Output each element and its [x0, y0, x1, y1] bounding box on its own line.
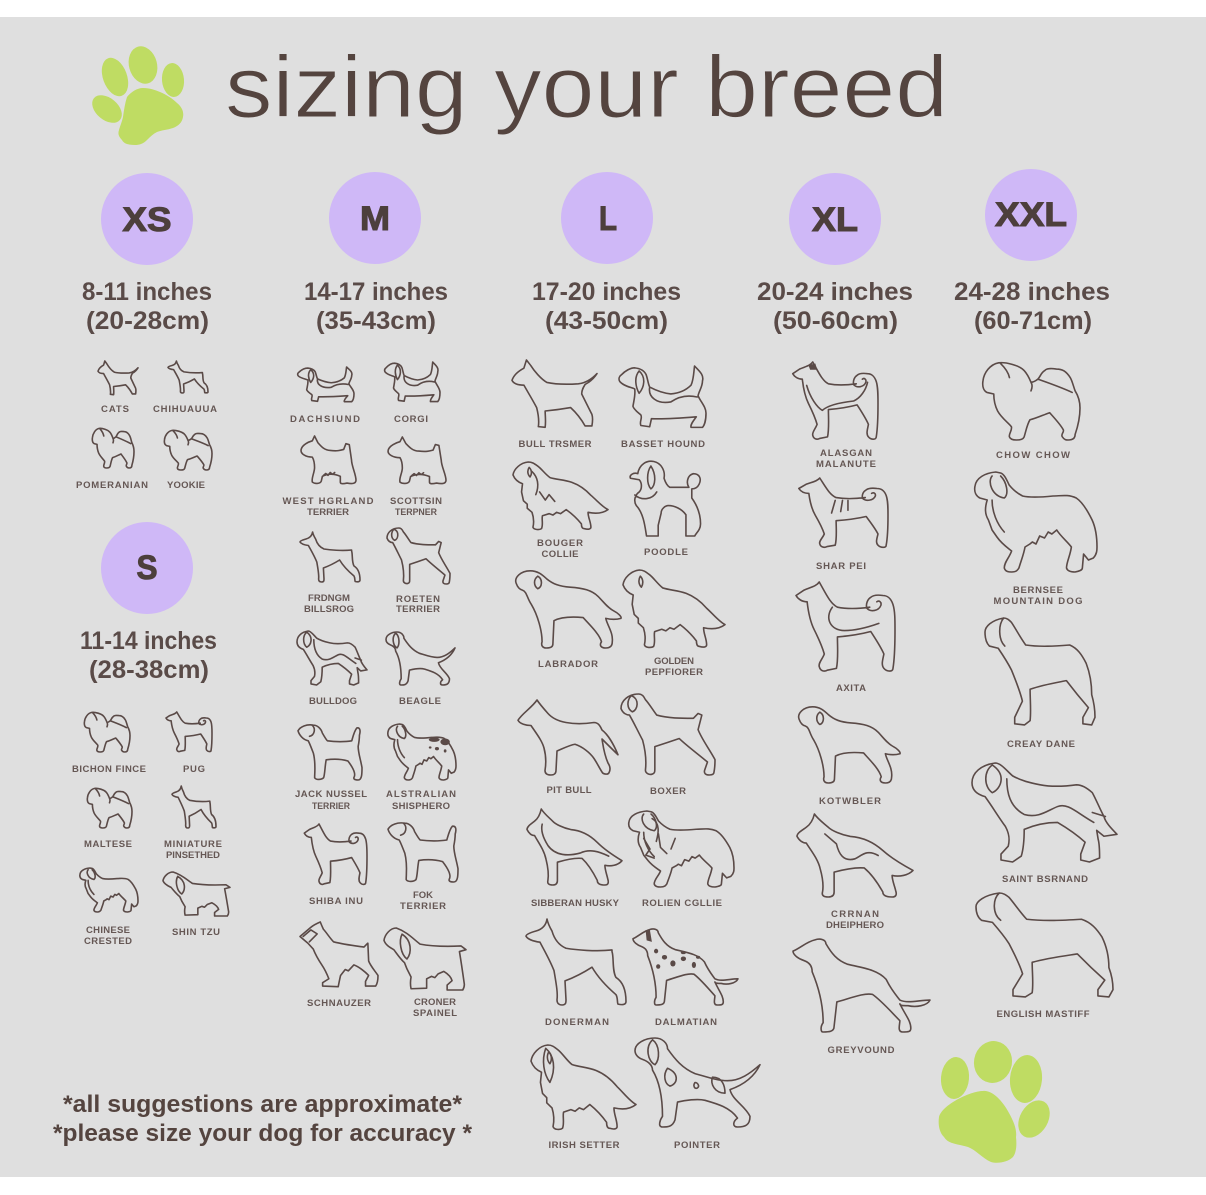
dog: scottish terrier: TERPNER [395, 507, 437, 518]
dog: fox terrier: FOK [413, 890, 433, 901]
dog: maltese [84, 788, 132, 850]
column: XXL [954, 169, 1117, 1020]
dog: miniature pinscher: PINSETHED [166, 850, 220, 861]
dog: bull terrier: BULL TRSMER [518, 439, 592, 450]
heading: XXL size [954, 278, 1110, 335]
dog: golden retriever [623, 570, 725, 678]
dog: alaskan malamute: MALANUTE [816, 459, 876, 470]
title: sizing your breed [225, 39, 948, 136]
dog: australian shepherd: ALSTRALIAN [386, 789, 456, 800]
dog: french bulldog [300, 532, 360, 615]
dog: chow chow [983, 363, 1080, 461]
heading: M size: 14-17 inches [304, 278, 448, 306]
dog: jack russell terrier [295, 725, 367, 812]
heading: XL size: (50-60cm) [773, 307, 898, 335]
dog: bulldog: BULLDOG [309, 696, 357, 707]
dog: jack russell terrier: JACK NUSSEL [295, 789, 367, 800]
dog: great dane: CREAY DANE [1007, 739, 1075, 750]
dog: australian shepherd: SHISPHERO [392, 801, 450, 812]
dog: french bulldog: BILLSROG [304, 604, 354, 615]
heading: XL size [757, 278, 913, 335]
heading: L size: 17-20 inches [532, 278, 681, 306]
dog: doberman [526, 919, 626, 1028]
dog: west highland terrier [282, 436, 374, 518]
dog: scottish terrier [388, 437, 446, 518]
dog: great dane [985, 618, 1095, 750]
dog: schnauzer [300, 922, 378, 1009]
dog: labrador: LABRADOR [538, 659, 598, 670]
heading: M size: (35-43cm) [316, 307, 436, 335]
dog: german shepherd: DHEIPHERO [826, 920, 884, 931]
dog: saint bernard: SAINT BSRNAND [1002, 874, 1088, 885]
dog: jack russell terrier: TERRIER [312, 801, 350, 812]
dog: pit bull: PIT BULL [546, 785, 592, 796]
column: XL [757, 173, 930, 1056]
dog: corgi: CORGI [394, 414, 428, 425]
column: XS [76, 173, 217, 491]
badge: XL [789, 173, 881, 265]
heading: XXL size: (60-71cm) [974, 307, 1092, 335]
dog: border collie [513, 462, 608, 560]
column: S [72, 522, 230, 947]
badge: XS [101, 173, 193, 265]
dog: maltese: MALTESE [84, 839, 132, 850]
heading: S size: 11-14 inches [80, 627, 217, 655]
dog: pointer [635, 1038, 760, 1151]
dog: golden retriever: GOLDEN [654, 656, 694, 667]
column: M [282, 172, 466, 1019]
dog: bernese mountain dog: MOUNTAIN DOG [994, 596, 1082, 607]
dog: fox terrier [388, 823, 458, 912]
badge: L: L [599, 200, 617, 238]
dog: cocker spaniel: SPAINEL [413, 1008, 457, 1019]
dog: german shepherd [797, 814, 913, 931]
dog: shiba inu: SHIBA INU [309, 896, 363, 907]
dog: beagle: BEAGLE [399, 696, 441, 707]
dog: pit bull [518, 700, 618, 796]
badge: M: M [360, 200, 390, 238]
heading: XXL size: 24-28 inches [954, 278, 1110, 306]
dog: basset hound [619, 366, 706, 450]
dog: shih tzu [163, 872, 230, 938]
heading: S size: (28-38cm) [89, 656, 209, 684]
dog: chihuahua [153, 361, 217, 415]
badge: L [561, 172, 653, 264]
dog: dalmatian: DALMATIAN [655, 1017, 717, 1028]
dog: west highland terrier: WEST HGRLAND [282, 496, 374, 507]
dog: cocker spaniel [384, 928, 466, 1019]
dog: golden retriever: PEPFIORER [645, 667, 703, 678]
dog: chinese crested: CHINESE [86, 925, 130, 936]
dog: bichon: BICHON FINCE [72, 764, 146, 775]
badge: S [101, 522, 193, 614]
badge: XXL [985, 169, 1077, 261]
dog: yorkie [164, 430, 212, 491]
dog: irish setter: IRISH SETTER [548, 1140, 620, 1151]
heading: XS size: 8-11 inches [82, 278, 212, 306]
badge: S: S [136, 549, 158, 587]
dog: pug [166, 712, 212, 775]
heading: XL size: 20-24 inches [757, 278, 913, 306]
badge: XS: XS [122, 201, 172, 239]
dog: rottweiler: KOTWBLER [819, 796, 881, 807]
icon: top paw [87, 43, 185, 145]
dog: cats [98, 361, 138, 415]
dog: cats: CATS [101, 404, 129, 415]
dog: siberian husky [527, 809, 622, 909]
dog: german shepherd: CRRNAN [831, 909, 879, 920]
badge: XL: XL [812, 201, 858, 239]
dog: chihuahua: CHIHUAUUA [153, 404, 217, 415]
dog: poodle [630, 461, 701, 558]
dog: doberman: DONERMAN [545, 1017, 609, 1028]
dog: basset hound: BASSET HOUND [621, 439, 705, 450]
dog: shar pei: SHAR PEI [816, 561, 866, 572]
dog: boxer [621, 694, 715, 797]
footnote: *please size your dog for accuracy * [53, 1120, 473, 1147]
heading: M size [304, 278, 448, 335]
footnote: *all suggestions are approximate* [63, 1091, 463, 1118]
dog: poodle: POODLE [644, 547, 688, 558]
badge: M [329, 172, 421, 264]
dog: bulldog [297, 631, 367, 707]
dog: corgi [385, 362, 440, 425]
dog: shih tzu: SHIN TZU [172, 927, 220, 938]
dog: bull terrier [512, 360, 597, 450]
dog: border collie: COLLIE [542, 549, 578, 560]
dog: beagle [386, 632, 455, 707]
badge: XXL: XXL [995, 196, 1067, 234]
dog: miniature pinscher [164, 786, 222, 861]
dog: akita: AXITA [836, 683, 866, 694]
heading: XS size: (20-28cm) [86, 307, 209, 335]
icon: bottom paw [939, 1038, 1056, 1163]
heading: S size [80, 627, 217, 684]
dog: scottish terrier: SCOTTSIN [390, 496, 442, 507]
dog: siberian husky: SIBBERAN HUSKY [531, 898, 620, 909]
dog: labrador [516, 571, 621, 670]
dog: greyhound: GREYVOUND [828, 1045, 895, 1056]
dog: boston terrier: ROETEN [396, 594, 440, 605]
dog: border collie: BOUGER [537, 538, 583, 549]
dog: boston terrier [387, 528, 450, 615]
dog: irish setter [531, 1045, 636, 1151]
dog: english mastiff: ENGLISH MASTIFF [996, 1009, 1090, 1020]
dog: yorkie: YOOKIE [167, 480, 205, 491]
dog: bernese mountain dog: BERNSEE [1013, 585, 1063, 596]
dog: chow chow: CHOW CHOW [996, 450, 1070, 461]
dog: shar pei [799, 478, 888, 572]
dog: rough collie [629, 811, 734, 909]
dog: fox terrier: TERRIER [400, 901, 446, 912]
dog: cocker spaniel: CRONER [414, 997, 456, 1008]
dog: dachshund: DACHSIUND [290, 414, 360, 425]
dog: alaskan malamute [793, 362, 878, 470]
dog: australian shepherd [386, 724, 456, 812]
dog: bichon [72, 712, 146, 775]
dog: pomeranian [76, 428, 148, 491]
dog: west highland terrier: TERRIER [307, 507, 349, 518]
heading: XS size [82, 278, 212, 335]
dog: alaskan malamute: ALASGAN [820, 448, 872, 459]
dog: chinese crested: CRESTED [84, 936, 132, 947]
dog: chinese crested [80, 868, 138, 947]
dog: shiba inu [304, 824, 367, 907]
dog: english mastiff [976, 893, 1113, 1020]
dog: pug: PUG [183, 764, 205, 775]
dog: dalmatian [633, 929, 738, 1028]
dog: miniature pinscher: MINIATURE [164, 839, 222, 850]
footnote [53, 1091, 473, 1147]
dog: pomeranian: POMERANIAN [76, 480, 148, 491]
dog: schnauzer: SCHNAUZER [307, 998, 371, 1009]
dog: saint bernard [972, 763, 1117, 885]
heading: L size [532, 278, 681, 335]
heading: L size: (43-50cm) [545, 307, 668, 335]
dog: rough collie: ROLIEN CGLLIE [642, 898, 722, 909]
dog: boxer: BOXER [650, 786, 686, 797]
dog: rottweiler [799, 707, 900, 807]
dog: akita [796, 582, 895, 694]
dog: pointer: POINTER [674, 1140, 720, 1151]
dog: greyhound [793, 939, 930, 1056]
dog: french bulldog: FRDNGM [308, 593, 350, 604]
dog: boston terrier: TERRIER [396, 604, 440, 615]
dog: bernese mountain dog [975, 472, 1097, 607]
column: L [512, 172, 760, 1151]
dog: dachshund [290, 367, 360, 425]
